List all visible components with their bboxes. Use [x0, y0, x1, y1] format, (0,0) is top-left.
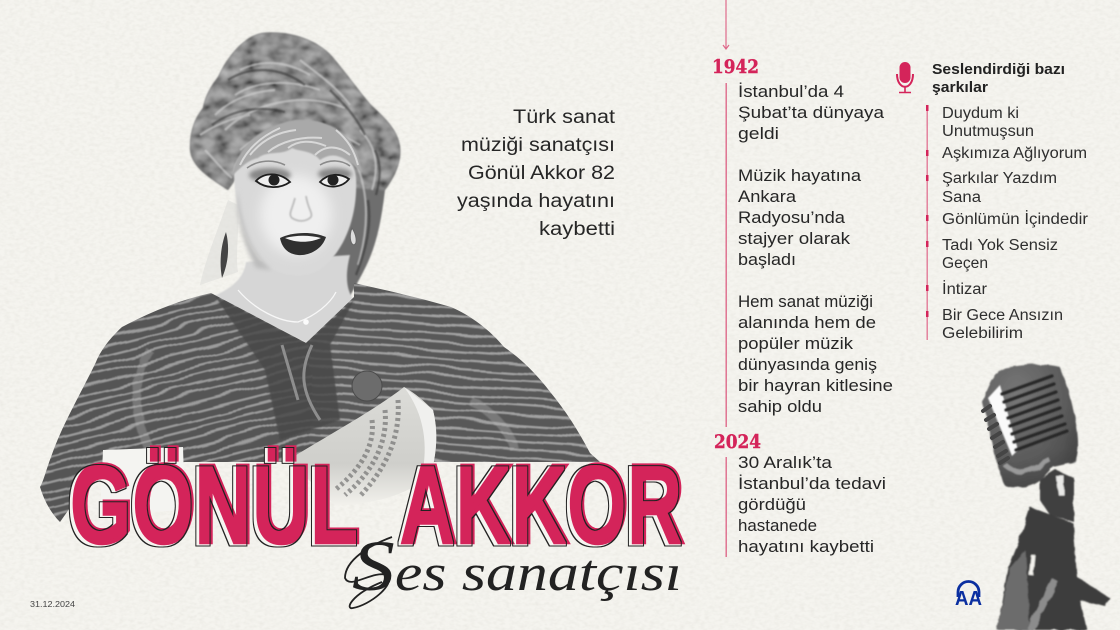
- eyes: [249, 168, 291, 182]
- stem: [1040, 470, 1074, 522]
- sheet of paper in hand: [288, 387, 436, 505]
- song titles: Geçen: [942, 255, 988, 272]
- song titles: Gönlümün İçindedir: [942, 210, 1088, 228]
- face: [232, 120, 362, 275]
- fame text: sahip oldu: [738, 398, 822, 416]
- birth text: Şubat’ta dünyaya: [738, 104, 885, 122]
- hand: [997, 507, 1110, 630]
- fame text: [738, 293, 893, 416]
- death text: [738, 454, 886, 556]
- loose hair and earring: [200, 200, 356, 285]
- title: name: GÖNÜL: [68, 445, 357, 568]
- timeline 2024: [714, 431, 886, 557]
- mic grille slats: [1002, 376, 1067, 450]
- career start text: Radyosu’nda: [738, 209, 846, 227]
- song titles: Unutmuşsun: [942, 123, 1034, 140]
- intro text: yaşında hayatını: [457, 191, 615, 212]
- intro text: Türk sanat: [513, 107, 616, 128]
- timeline 1942: [712, 56, 893, 427]
- career start text: Ankara: [738, 188, 797, 206]
- death text: hastanede: [738, 517, 817, 535]
- eyebrows: [247, 161, 350, 168]
- death text: İstanbul’da tedavi: [738, 474, 886, 493]
- timeline line: [726, 83, 727, 427]
- death text: hayatını kaybetti: [738, 538, 874, 556]
- hair strands: [200, 60, 376, 265]
- songs heading: [932, 62, 1065, 96]
- song titles: Şarkılar Yazdım: [942, 170, 1057, 187]
- birth text: [738, 82, 885, 143]
- blouse: [40, 283, 600, 522]
- career start text: Müzik hayatına: [738, 167, 862, 185]
- portrait photo of Gönül Akkor: [20, 32, 620, 540]
- white paper behind the title: [100, 447, 185, 515]
- necklace: [238, 290, 336, 322]
- year 1942: 1942: [712, 56, 759, 78]
- song titles: Duydum ki: [942, 105, 1019, 122]
- illustration: vintage microphone in hand: [983, 364, 1110, 630]
- mic side slats: [983, 406, 1008, 463]
- intro text: Gönül Akkor 82: [468, 163, 615, 184]
- songs heading: şarkılar: [932, 80, 988, 96]
- mic highlight: [988, 385, 1018, 456]
- song titles: [942, 105, 1088, 342]
- fame text: popüler müzik: [738, 335, 854, 353]
- title: name: AKKOR: [398, 445, 681, 568]
- title: name: AKKOR: [401, 443, 684, 566]
- career start text: [738, 167, 862, 269]
- nose: [290, 196, 311, 221]
- song titles: İntizar: [942, 280, 987, 298]
- song titles: Tadı Yok Sensiz: [942, 237, 1058, 254]
- songs heading: Seslendirdiği bazı: [932, 62, 1065, 78]
- intro text: müziği sanatçısı: [461, 135, 615, 156]
- subtitle: profession: Ses sanatçısı: [352, 526, 682, 606]
- career start text: stajyer olarak: [738, 230, 851, 248]
- neck: [214, 255, 354, 343]
- career start text: başladı: [738, 251, 796, 269]
- intro text: [457, 107, 616, 240]
- fame text: bir hayran kitlesine: [738, 377, 893, 395]
- logo: Anadolu Agency: AA: [955, 588, 982, 610]
- icon: microphone: [897, 62, 913, 92]
- fringe: [232, 120, 362, 176]
- timeline line: [726, 457, 727, 557]
- song titles: Sana: [942, 189, 981, 206]
- timeline arrow: [723, 0, 729, 49]
- mic head: [983, 364, 1078, 487]
- hair: [190, 32, 400, 296]
- mouth: [280, 233, 326, 255]
- death text: gördüğü: [738, 496, 806, 514]
- fame text: dünyasında geniş: [738, 356, 877, 374]
- title: name: AKKOR: [398, 445, 681, 568]
- song titles: Gelebilirim: [942, 325, 1023, 342]
- title: name: [68, 443, 684, 568]
- brooch: [352, 371, 382, 401]
- date: 31.12.2024: [30, 599, 75, 609]
- song titles: Bir Gece Ansızın: [942, 307, 1063, 324]
- fame text: Hem sanat müziği: [738, 293, 873, 311]
- songs list: [926, 105, 1088, 342]
- birth text: geldi: [738, 125, 779, 143]
- year 2024: 2024: [714, 431, 761, 453]
- title: name: GÖNÜL: [68, 445, 357, 568]
- death text: 30 Aralık’ta: [738, 454, 833, 472]
- list line with markers: [926, 105, 928, 340]
- birth text: İstanbul’da 4: [738, 82, 844, 101]
- title: name: GÖNÜL: [71, 443, 360, 566]
- fame text: alanında hem de: [738, 314, 876, 332]
- intro text: kaybetti: [539, 219, 615, 240]
- song titles: Aşkımıza Ağlıyorum: [942, 145, 1087, 162]
